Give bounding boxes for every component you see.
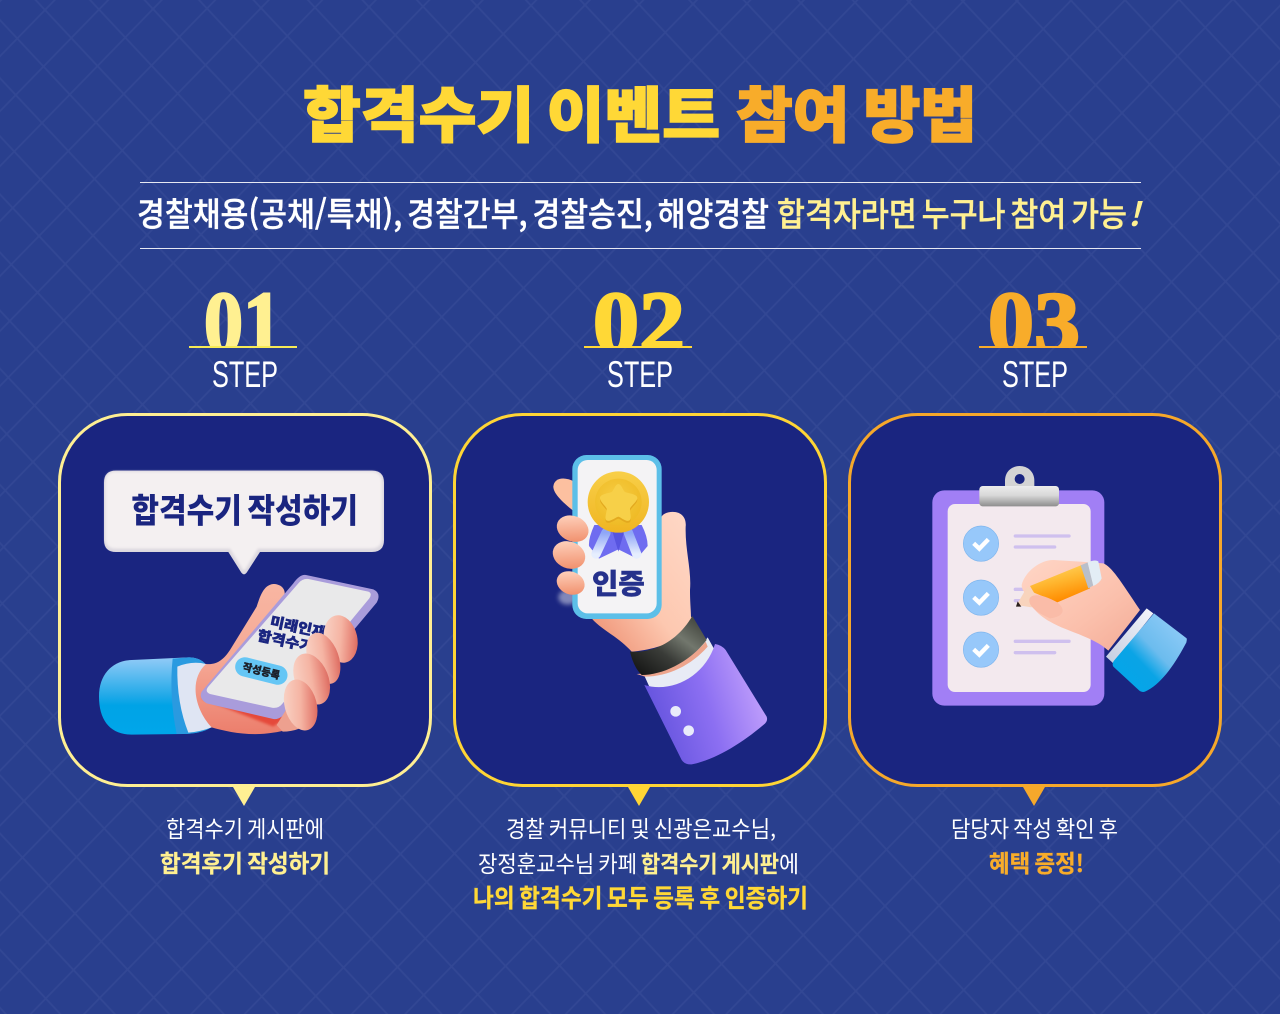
caption: step 2: 나의 합격수기 모두 등록 후 인증하기 [473, 879, 808, 915]
icon: clipboard checklist [932, 466, 1104, 706]
subtitle band [137, 182, 1143, 249]
icon: hand writing with pencil [1016, 560, 1187, 692]
caption: step 2: 합격수기 게시판 [641, 845, 779, 879]
icon: hand holding phone: 작성등록 [241, 658, 282, 682]
subtitle band: 합격자라면 누구나 참여 가능 [777, 188, 1127, 236]
icon: hand holding phone: 합격수기 [256, 625, 315, 657]
speech bubble [104, 471, 384, 574]
step 1 heading: 01 [204, 275, 282, 372]
step 2 heading: 02 [593, 275, 685, 372]
caption: step 1: 합격후기 작성하기 [160, 844, 330, 879]
icon: hand holding phone: 미래인재 [268, 611, 328, 643]
panel: step 3 benefit [850, 414, 1220, 806]
icon: hand holding certificate phone [549, 455, 767, 764]
step 3 heading: STEP [1002, 354, 1068, 395]
panel: step 2 certification [454, 414, 826, 806]
step 3 heading: 03 [988, 275, 1080, 372]
icon: hand holding phone [99, 575, 379, 735]
panel: step 1 write review [60, 414, 430, 806]
caption: step 1: 합격수기 게시판에 [166, 810, 324, 844]
title: 합격수기 이벤트 [303, 68, 720, 155]
step 1 heading: STEP [212, 354, 278, 395]
caption: step 3: 혜택 증정! [989, 844, 1084, 879]
step 2 heading [584, 292, 692, 388]
subtitle band: ! [1128, 188, 1143, 236]
caption: step 3 [951, 810, 1118, 879]
title: 참여 방법 [736, 68, 977, 155]
caption: step 2: 장정훈교수님 카페 [478, 845, 637, 879]
icon: hand holding certificate phone: 인증 [592, 562, 645, 602]
subtitle band: 경찰채용(공채/특채), 경찰간부, 경찰승진, 해양경찰 [137, 188, 769, 236]
step 2 heading: STEP [607, 354, 673, 395]
title [303, 68, 977, 155]
caption: step 2 [473, 810, 808, 915]
step 1 heading [189, 292, 297, 388]
caption: step 2: 에 [779, 845, 799, 879]
caption: step 3: 담당자 작성 확인 후 [951, 810, 1118, 844]
step 3 heading [979, 292, 1087, 388]
caption: step 1 [160, 810, 330, 879]
medal [588, 471, 649, 559]
speech bubble: 합격수기 작성하기 [131, 484, 358, 533]
caption: step 2: 경찰 커뮤니티 및 신광은교수님, [506, 810, 776, 844]
